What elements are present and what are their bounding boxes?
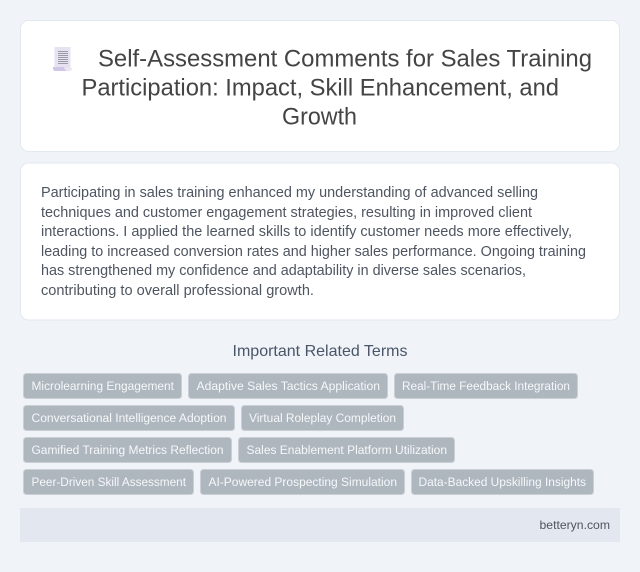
panel: related term tags	[24, 374, 594, 494]
panel: self-assessment comment	[20, 163, 620, 320]
tag: Sales Enablement Platform Utilization	[238, 438, 454, 462]
tag: Sales Enablement Platform Utilization: Sales Enablement Platform Utilization	[246, 443, 447, 457]
tag: Real-Time Feedback Integration	[394, 374, 578, 398]
text block: comment paragraph: techniques and customer engagement strategies, resulting in improved client	[41, 205, 532, 221]
tag: Adaptive Sales Tactics Application	[188, 374, 388, 398]
tag: AI-Powered Prospecting Simulation	[200, 470, 404, 494]
title: Self-Assessment Comments for Sales Training	[98, 46, 592, 72]
tag: Conversational Intelligence Adoption: Conversational Intelligence Adoption	[32, 411, 226, 425]
text block: comment paragraph: interactions. I applied the learned skills to identify customer needs more effectively,	[41, 224, 572, 240]
tag: Real-Time Feedback Integration: Real-Time Feedback Integration	[402, 379, 570, 393]
tag: AI-Powered Prospecting Simulation: AI-Powered Prospecting Simulation	[208, 475, 397, 489]
tag: Adaptive Sales Tactics Application: Adaptive Sales Tactics Application	[196, 379, 380, 393]
tag: Conversational Intelligence Adoption	[24, 406, 234, 430]
tag: Virtual Roleplay Completion	[242, 406, 404, 430]
icon: document scroll	[53, 47, 72, 71]
tag: Microlearning Engagement	[24, 374, 182, 398]
tag: Peer-Driven Skill Assessment	[24, 470, 194, 494]
title: Growth	[282, 104, 357, 130]
text block: comment paragraph	[41, 185, 586, 299]
tag: Peer-Driven Skill Assessment: Peer-Driven Skill Assessment	[32, 475, 187, 489]
panel: title card	[20, 20, 620, 152]
footer bar	[20, 508, 620, 542]
footer text: site name: betteryn.com	[540, 518, 610, 532]
text block: comment paragraph: has strengthened my confidence and adaptability in diverse sales scenarios,	[41, 263, 526, 279]
title: Participation: Impact, Skill Enhancement, and	[82, 74, 559, 102]
text block: comment paragraph: contributing to overall professional growth.	[41, 283, 314, 299]
tag: Gamified Training Metrics Reflection	[24, 438, 232, 462]
tag: Gamified Training Metrics Reflection: Gamified Training Metrics Reflection	[32, 443, 224, 457]
text block: comment paragraph: leading to increased conversion rates and higher sales performance. Ongoing training	[41, 244, 586, 260]
title	[82, 46, 592, 130]
tag: Data-Backed Upskilling Insights	[412, 470, 594, 494]
tag: Microlearning Engagement: Microlearning Engagement	[32, 379, 175, 393]
tag: Data-Backed Upskilling Insights: Data-Backed Upskilling Insights	[418, 475, 586, 489]
heading: related terms: Important Related Terms	[232, 343, 408, 360]
tag: Virtual Roleplay Completion: Virtual Roleplay Completion	[249, 411, 396, 425]
text block: comment paragraph: Participating in sales training enhanced my understanding of advanced selling	[41, 185, 538, 201]
